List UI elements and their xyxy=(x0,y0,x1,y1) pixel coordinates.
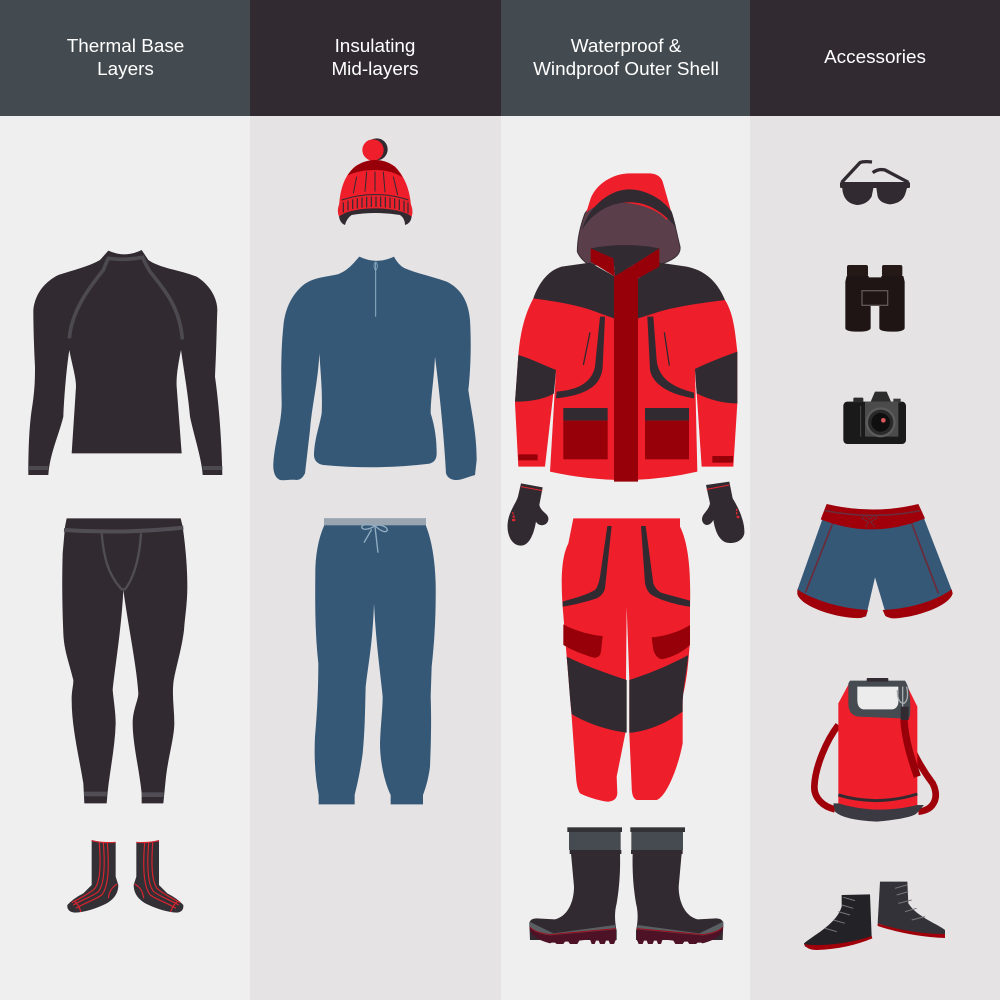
hood xyxy=(577,173,680,265)
icon: dry bag xyxy=(814,678,936,822)
icon: binoculars xyxy=(845,265,905,332)
collar and zip placket xyxy=(591,245,659,277)
thermal base top xyxy=(28,250,222,475)
chest pockets xyxy=(563,408,608,421)
left boot xyxy=(529,827,622,944)
heading: Accessories xyxy=(750,0,1000,116)
heading: Accessories: Accessories xyxy=(824,47,926,68)
thermal socks xyxy=(67,840,183,913)
heading: Insulating Mid-layers xyxy=(250,0,501,116)
icon: lace-up boots xyxy=(804,882,945,950)
pocket seams xyxy=(556,317,694,398)
heading: Waterproof and Windproof Outer Shell: Windproof Outer Shell xyxy=(533,59,719,80)
heading: Insulating Mid-layers: Insulating xyxy=(335,36,415,57)
heading: Waterproof and Windproof Outer Shell: Waterproof & xyxy=(571,36,682,57)
icon: swim shorts xyxy=(797,504,953,618)
mittens xyxy=(508,482,744,546)
icon: sunglasses xyxy=(840,162,910,205)
heading: Thermal Base Layers: Thermal Base xyxy=(67,36,184,57)
rubber boots xyxy=(529,827,723,944)
outer shell trousers xyxy=(562,518,690,802)
beanie hat xyxy=(338,138,412,225)
icon: camera xyxy=(843,392,906,444)
heading: Insulating Mid-layers: Mid-layers xyxy=(331,59,419,80)
insulating mid-layer pants xyxy=(315,518,436,804)
heading: Thermal Base Layers: Layers xyxy=(97,59,154,80)
right boot xyxy=(630,827,723,944)
thermal base leggings xyxy=(62,518,187,803)
heading: Waterproof and Windproof Outer Shell xyxy=(501,0,750,116)
heading: Thermal Base Layers xyxy=(0,0,250,116)
insulating mid-layer fleece top xyxy=(273,257,477,480)
shoulder yoke xyxy=(533,263,725,318)
outer shell jacket xyxy=(515,173,737,482)
jacket body xyxy=(515,298,737,480)
